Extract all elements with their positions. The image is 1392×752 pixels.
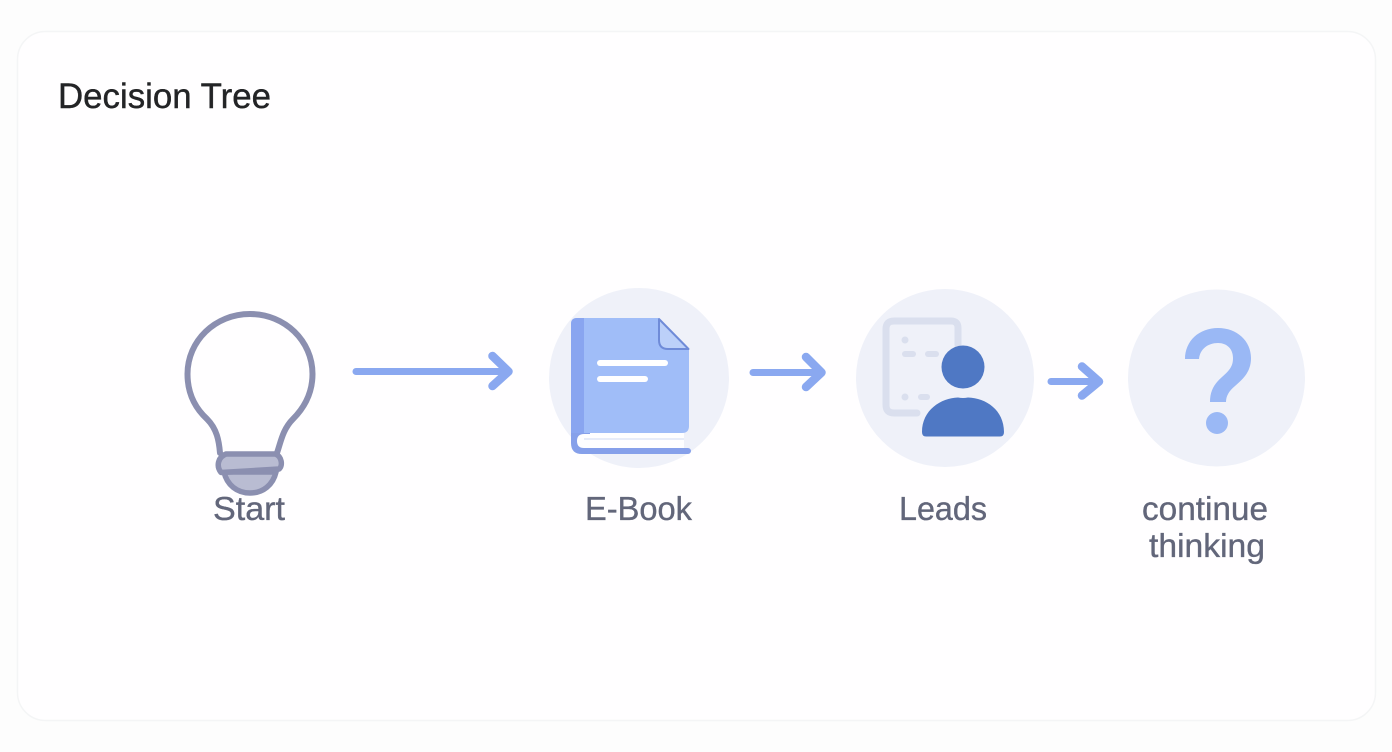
- icon: document: [886, 321, 958, 413]
- step: start: [188, 314, 312, 527]
- arrow: leads to continue thinking: [1051, 366, 1099, 396]
- label: leads: Leads: [899, 490, 987, 527]
- label: continue thinking: thinking: [1149, 527, 1265, 564]
- label: start: Start: [213, 490, 285, 527]
- icon circle: e-book: [549, 288, 729, 468]
- icon: question mark: [1185, 328, 1251, 434]
- icon circle: leads: [856, 289, 1034, 467]
- label: continue thinking: continue: [1142, 490, 1268, 527]
- arrow: start to e-book: [356, 356, 508, 386]
- arrow: e-book to leads: [753, 357, 822, 387]
- icon: person: [922, 346, 1004, 436]
- step: e-book: [549, 288, 729, 527]
- step: leads: [856, 289, 1034, 527]
- label: e-book: E-Book: [585, 490, 692, 527]
- title: Decision Tree: [58, 77, 271, 116]
- icon: light bulb: [188, 314, 312, 493]
- step: continue thinking: [1128, 290, 1305, 564]
- icon circle: question: [1128, 290, 1305, 466]
- icon: book: [571, 318, 691, 454]
- label: continue thinking: [1142, 490, 1268, 564]
